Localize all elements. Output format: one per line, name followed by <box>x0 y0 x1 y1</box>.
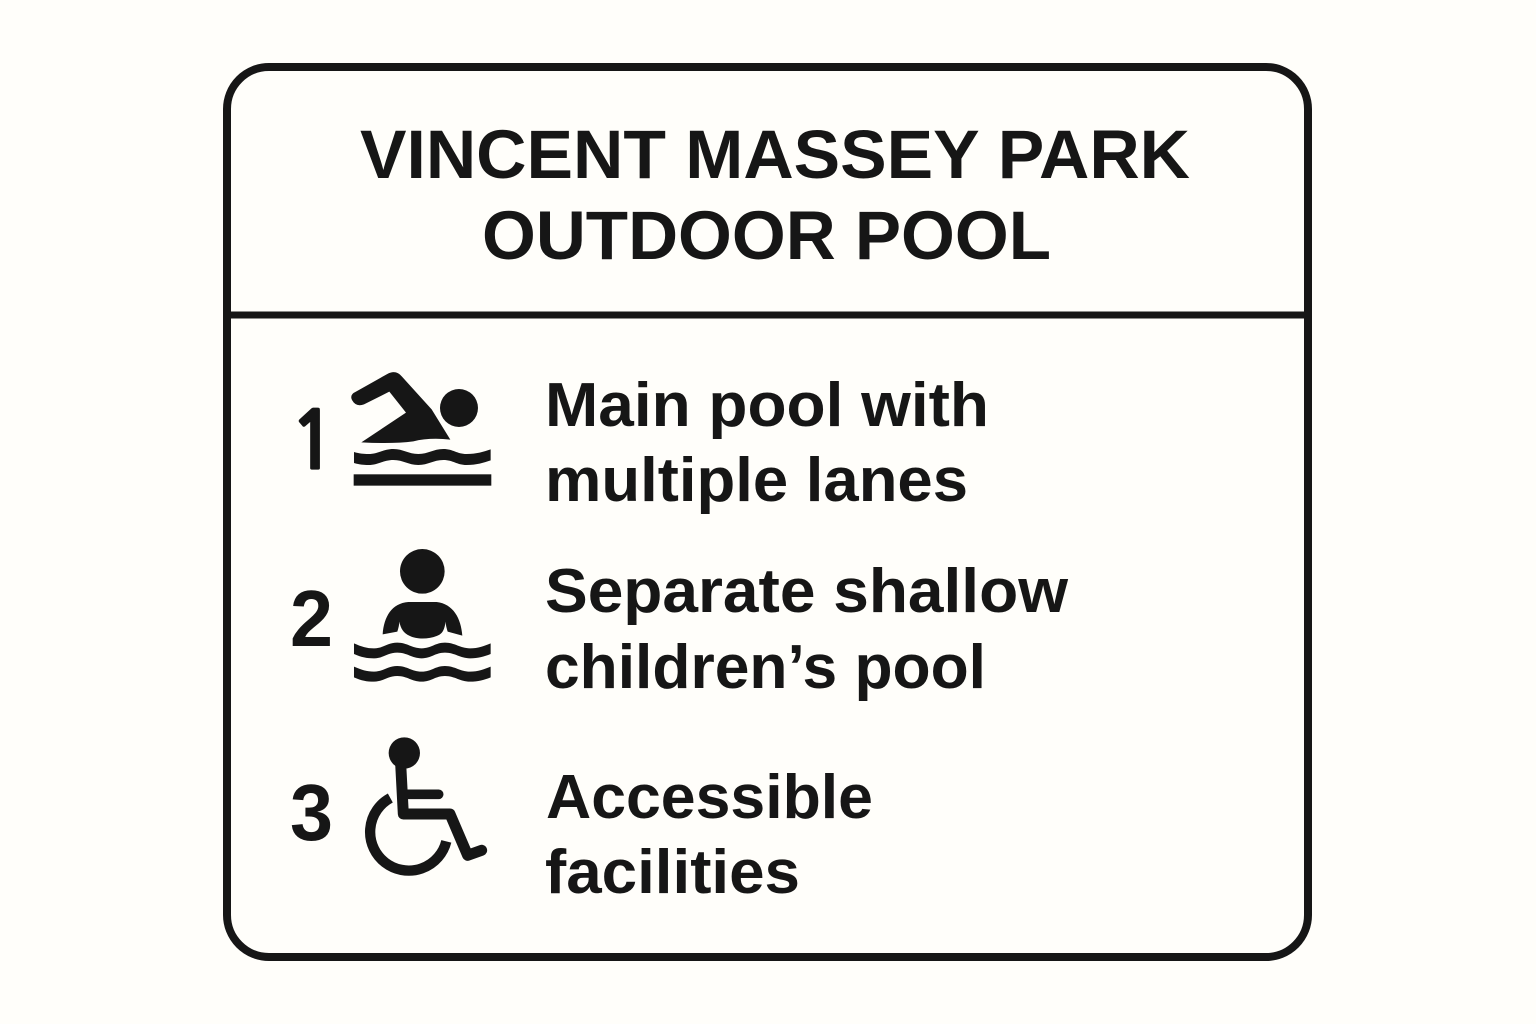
text: accessible facilities: Accessible <box>546 763 873 832</box>
panel: sign frame <box>227 67 1308 957</box>
text: separate shallow children's pool: children’s pool <box>545 633 986 702</box>
number 2: 2 <box>290 574 333 663</box>
number 1: 1 <box>289 402 337 481</box>
text: separate shallow children's pool: Separate shallow <box>545 557 1069 626</box>
item 3: accessible facilities <box>290 737 873 907</box>
text: accessible facilities: facilities <box>545 838 800 907</box>
number 3: 3 <box>290 768 333 857</box>
item 1: main pool <box>289 371 989 515</box>
text: main pool with multiple lanes: multiple lanes <box>545 446 968 515</box>
text: main pool with multiple lanes <box>545 371 989 515</box>
text: separate shallow children's pool <box>545 557 1069 702</box>
text: main pool with multiple lanes: Main pool with <box>545 371 989 440</box>
text: accessible facilities <box>545 763 873 907</box>
title: VINCENT MASSEY PARK <box>360 116 1190 193</box>
icon: wheelchair <box>370 737 482 871</box>
item 2: shallow pool <box>290 549 1069 702</box>
icon: child in water <box>354 549 491 682</box>
icon: swimmer <box>351 372 491 486</box>
title: OUTDOOR POOL <box>482 197 1051 274</box>
title <box>360 116 1190 274</box>
